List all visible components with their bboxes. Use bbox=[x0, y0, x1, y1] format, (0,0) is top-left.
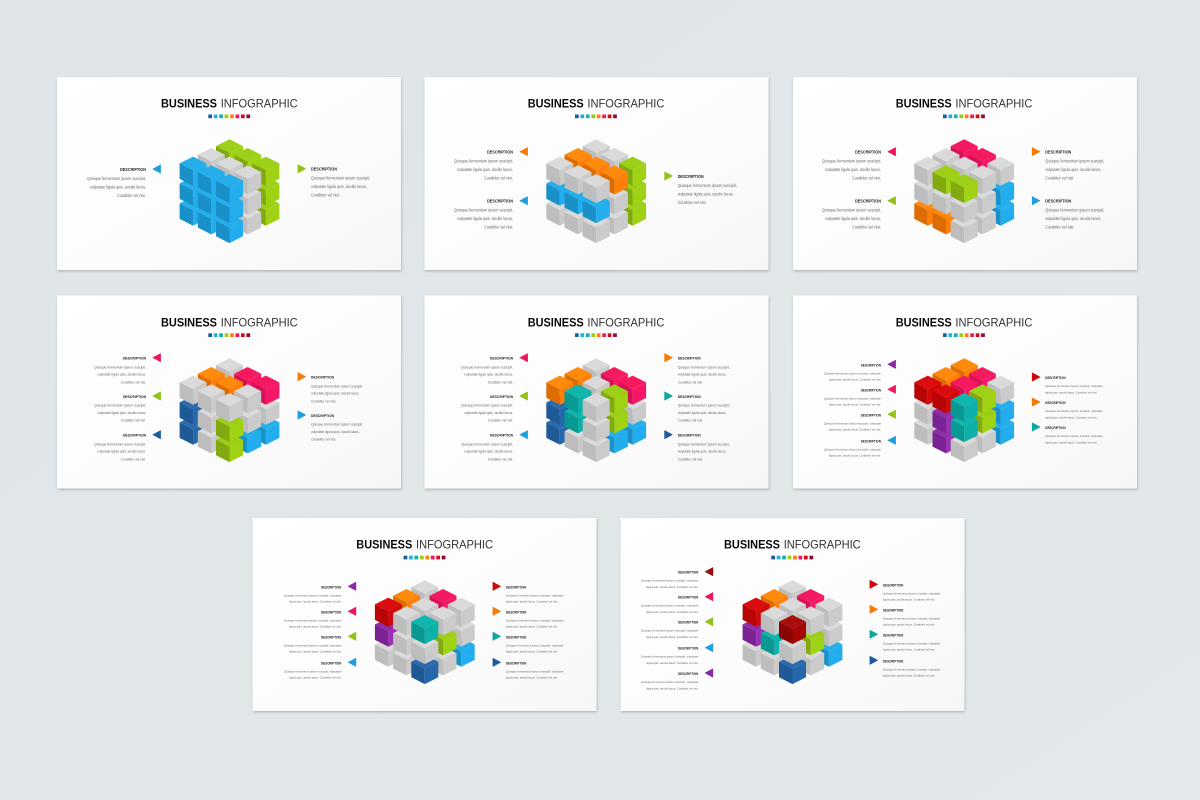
callout: left pink: DESCRIPTION bbox=[321, 610, 342, 614]
callout: right navy: Quisque fermentum ipsum suscipit, vulputate bbox=[506, 669, 564, 673]
callout: left green: DESCRIPTION bbox=[861, 413, 881, 417]
callout: right green bbox=[298, 165, 370, 197]
title: BUSINESS bbox=[724, 538, 780, 552]
callout: left green bbox=[822, 197, 896, 230]
cube: slide 7 bbox=[375, 580, 475, 684]
cube: slide 5 bbox=[546, 358, 646, 462]
callout: right red: DESCRIPTION bbox=[883, 583, 904, 587]
callout: right orange: DESCRIPTION bbox=[1045, 150, 1071, 155]
callout: left pink bbox=[822, 148, 896, 180]
callout: left navy: vulputate ligula quis, iaculis lacus. bbox=[97, 450, 146, 454]
callout: right orange: ligula quis, iaculis lacus. Curabitur vel nisi. bbox=[883, 623, 935, 627]
title: INFOGRAPHIC bbox=[221, 96, 298, 110]
callout: right blue: vulputate ligula quis, iaculis lacus. bbox=[311, 430, 360, 434]
callout: right red: DESCRIPTION bbox=[1045, 376, 1066, 380]
callout: right orange: ligula quis, iaculis lacus. Curabitur vel nisi. bbox=[1045, 415, 1097, 419]
callout: left pink: DESCRIPTION bbox=[855, 150, 881, 155]
callout: right orange: Quisque fermentum ipsum suscipit, vulputate bbox=[506, 618, 564, 622]
callout: left navy: Curabitur vel nisi. bbox=[121, 457, 146, 461]
callout: left orange: Quisque fermentum ipsum suscipit, bbox=[454, 158, 513, 164]
callout: left purple bbox=[284, 582, 356, 604]
cube: slide 3 bbox=[914, 139, 1014, 243]
callout: right orange: Curabitur vel nisi. bbox=[678, 380, 703, 384]
callout: right blue bbox=[298, 411, 363, 442]
panel: slide 4 bbox=[57, 296, 402, 490]
callout: right navy: Curabitur vel nisi. bbox=[678, 457, 703, 461]
callout: right orange: DESCRIPTION bbox=[678, 357, 701, 361]
callout: left pink: Quisque fermentum ipsum suscipit, bbox=[461, 365, 513, 369]
callout: left orange: vulputate ligula quis, iaculis lacus. bbox=[457, 167, 513, 172]
callout: right navy: ligula quis, iaculis lacus. Curabitur vel nisi. bbox=[506, 676, 558, 680]
callout: left green: vulputate ligula quis, iaculis lacus. bbox=[825, 216, 881, 221]
callout: left green: DESCRIPTION bbox=[678, 621, 699, 625]
callout: left blue: DESCRIPTION bbox=[487, 199, 513, 204]
callout: left green: Curabitur vel nisi. bbox=[488, 419, 513, 423]
callout: right navy bbox=[493, 658, 564, 680]
callout: right orange: Quisque fermentum ipsum suscipit, bbox=[1045, 158, 1104, 164]
color squares bbox=[575, 333, 617, 337]
panel: slide 8 bbox=[620, 518, 965, 712]
callout: left purple: Quisque fermentum ipsum suscipit, vulputate bbox=[824, 371, 881, 375]
callout: right teal: ligula quis, iaculis lacus. Curabitur vel nisi. bbox=[1045, 440, 1097, 444]
callout: left blue: ligula quis, iaculis lacus. Curabitur vel nisi. bbox=[646, 661, 698, 665]
callout: left green: DESCRIPTION bbox=[855, 199, 881, 204]
callout: right orange: DESCRIPTION bbox=[883, 608, 904, 612]
callout: left navy: DESCRIPTION bbox=[123, 434, 146, 438]
callout: right green: DESCRIPTION bbox=[311, 166, 337, 172]
callout: right green: DESCRIPTION bbox=[678, 174, 704, 179]
callout: left blue: DESCRIPTION bbox=[321, 661, 342, 665]
cube: slide 6 bbox=[914, 358, 1014, 462]
panel: slide 3 bbox=[793, 77, 1138, 271]
callout: left pink bbox=[824, 385, 896, 407]
color squares bbox=[404, 556, 445, 559]
callout: right orange: Quisque fermentum ipsum suscipit, vulputate bbox=[883, 616, 941, 620]
callout: left pink: Curabitur vel nisi. bbox=[852, 176, 881, 180]
callout: left blue: Quisque fermentum ipsum suscipit, vulputate bbox=[284, 669, 342, 673]
title bbox=[896, 96, 1033, 110]
callout: right red: Quisque fermentum ipsum suscipit, vulputate bbox=[883, 591, 941, 595]
callout: left pink: vulputate ligula quis, iaculis lacus. bbox=[97, 373, 146, 377]
callout: left green: DESCRIPTION bbox=[123, 395, 146, 399]
callout: left pink: Quisque fermentum ipsum suscipit, vulputate bbox=[641, 604, 699, 608]
callout: right orange: DESCRIPTION bbox=[506, 610, 527, 614]
callout: left pink: vulputate ligula quis, iaculis lacus. bbox=[825, 167, 881, 172]
callout: right navy: DESCRIPTION bbox=[883, 659, 904, 663]
callout: left blue: vulputate ligula quis, iaculis lacus. bbox=[90, 184, 146, 190]
color squares bbox=[771, 556, 813, 559]
callout: right green: Curabitur vel nisi. bbox=[678, 200, 707, 205]
title: BUSINESS bbox=[528, 96, 584, 110]
callout: left green: Quisque fermentum ipsum suscipit, vulputate bbox=[641, 629, 699, 633]
callout: right teal: Curabitur vel nisi. bbox=[678, 419, 703, 423]
callout: left blue bbox=[824, 436, 896, 458]
callout: left purple: ligula quis, iaculis lacus. Curabitur vel nisi. bbox=[289, 600, 341, 604]
callout: right green: Quisque fermentum ipsum suscipit, bbox=[311, 175, 370, 180]
callout: left blue: vulputate ligula quis, iaculis lacus. bbox=[464, 450, 513, 454]
callout: right teal: Quisque fermentum ipsum suscipit, vulputate bbox=[883, 641, 941, 645]
callout: right orange: vulputate ligula quis, iaculis lacus. bbox=[678, 373, 726, 377]
callout: left blue: Quisque fermentum ipsum suscipit, vulputate bbox=[824, 447, 881, 451]
color squares bbox=[943, 114, 985, 118]
callout: right orange bbox=[298, 373, 363, 403]
callout: left dark red: DESCRIPTION bbox=[678, 571, 699, 575]
callout: left green bbox=[641, 618, 713, 639]
callout: right orange bbox=[870, 605, 941, 627]
callout: left green: Quisque fermentum ipsum suscipit, bbox=[94, 404, 146, 408]
panel: slide 2 bbox=[424, 77, 769, 271]
title bbox=[528, 96, 665, 110]
card bbox=[57, 77, 402, 271]
callout: right teal: Quisque fermentum ipsum suscipit, bbox=[678, 404, 730, 408]
callout: left pink: ligula quis, iaculis lacus. Curabitur vel nisi. bbox=[289, 625, 341, 629]
callout: right orange: Curabitur vel nisi. bbox=[311, 399, 336, 403]
cube: slide 4 bbox=[180, 358, 279, 462]
callout: right red: ligula quis, iaculis lacus. Curabitur vel nisi. bbox=[1045, 390, 1097, 394]
title: INFOGRAPHIC bbox=[955, 96, 1033, 110]
callout: left pink: Quisque fermentum ipsum suscipit, vulputate bbox=[284, 618, 342, 622]
title: INFOGRAPHIC bbox=[955, 316, 1033, 330]
callout: left purple: ligula quis, iaculis lacus. Curabitur vel nisi. bbox=[829, 378, 881, 382]
title bbox=[161, 96, 298, 110]
callout: right blue: Curabitur vel nisi. bbox=[1045, 224, 1074, 230]
card bbox=[793, 77, 1138, 271]
callout: right teal: DESCRIPTION bbox=[678, 395, 701, 399]
callout: left blue: DESCRIPTION bbox=[678, 647, 699, 651]
panel: slide 5 bbox=[424, 296, 769, 490]
callout: right red: ligula quis, iaculis lacus. Curabitur vel nisi. bbox=[506, 600, 558, 604]
callout: left green: Quisque fermentum ipsum suscipit, vulputate bbox=[284, 643, 342, 647]
card bbox=[424, 296, 769, 490]
callout: left purple bbox=[824, 360, 896, 382]
callout: right green: Curabitur vel nisi. bbox=[311, 192, 340, 197]
callout: right orange: DESCRIPTION bbox=[311, 376, 334, 380]
title: BUSINESS bbox=[528, 316, 584, 330]
card bbox=[620, 518, 965, 712]
callout: left orange bbox=[454, 148, 528, 180]
callout: right green: vulputate ligula quis, iaculis lacus. bbox=[678, 192, 734, 196]
callout: left green bbox=[284, 632, 356, 654]
title bbox=[161, 316, 298, 330]
callout: right orange: Quisque fermentum ipsum suscipit, vulputate bbox=[1045, 409, 1103, 413]
callout: left purple: DESCRIPTION bbox=[861, 363, 881, 367]
title: INFOGRAPHIC bbox=[221, 316, 298, 330]
callout: left blue: ligula quis, iaculis lacus. Curabitur vel nisi. bbox=[829, 454, 881, 458]
callout: left dark red: ligula quis, iaculis lacus. Curabitur vel nisi. bbox=[646, 585, 698, 589]
callout: right green: vulputate ligula quis, iaculis lacus. bbox=[311, 184, 367, 189]
callout: right orange: ligula quis, iaculis lacus. Curabitur vel nisi. bbox=[506, 625, 558, 629]
callout: left navy bbox=[94, 431, 160, 461]
callout: left green: Curabitur vel nisi. bbox=[121, 419, 146, 423]
title: INFOGRAPHIC bbox=[587, 96, 665, 110]
callout: right blue: DESCRIPTION bbox=[1045, 199, 1071, 204]
color squares bbox=[208, 114, 250, 118]
callout: right orange: Quisque fermentum ipsum suscipit, bbox=[311, 384, 363, 388]
callout: right blue: vulputate ligula quis, iaculis lacus. bbox=[1045, 216, 1101, 221]
panel: slide 7 bbox=[252, 518, 597, 712]
callout: left blue: Curabitur vel nisi. bbox=[488, 457, 513, 461]
callout: left orange: DESCRIPTION bbox=[487, 150, 513, 155]
callout: right teal: ligula quis, iaculis lacus. Curabitur vel nisi. bbox=[506, 650, 558, 654]
callout: right orange: DESCRIPTION bbox=[1045, 401, 1066, 405]
callout: left blue: Quisque fermentum ipsum suscipit, bbox=[87, 176, 146, 181]
title: INFOGRAPHIC bbox=[416, 538, 493, 552]
title: INFOGRAPHIC bbox=[784, 538, 861, 552]
callout: left blue bbox=[87, 165, 160, 198]
callout: left navy: Quisque fermentum ipsum suscipit, bbox=[94, 442, 146, 446]
callout: left pink: DESCRIPTION bbox=[490, 357, 513, 361]
callout: left blue: Quisque fermentum ipsum suscipit, bbox=[461, 442, 513, 446]
title: BUSINESS bbox=[356, 538, 412, 552]
callout: right navy bbox=[665, 431, 730, 461]
callout: right red bbox=[870, 580, 941, 602]
callout: left blue: Quisque fermentum ipsum suscipit, bbox=[454, 208, 513, 212]
callout: right navy: Quisque fermentum ipsum suscipit, vulputate bbox=[883, 667, 941, 671]
callout: right red: ligula quis, iaculis lacus. Curabitur vel nisi. bbox=[883, 598, 935, 602]
callout: right navy: Quisque fermentum ipsum suscipit, bbox=[678, 442, 730, 446]
callout: right navy: DESCRIPTION bbox=[506, 661, 527, 665]
callout: right orange: vulputate ligula quis, iaculis lacus. bbox=[1045, 167, 1101, 172]
callout: left green: vulputate ligula quis, iaculis lacus. bbox=[97, 411, 146, 415]
callout: left green: Quisque fermentum ipsum suscipit, bbox=[822, 208, 881, 212]
color squares bbox=[208, 333, 250, 337]
callout: left green: ligula quis, iaculis lacus. Curabitur vel nisi. bbox=[289, 650, 341, 654]
callout: right blue: Curabitur vel nisi. bbox=[311, 438, 336, 442]
callout: left orange: Curabitur vel nisi. bbox=[484, 176, 513, 180]
callout: left pink: ligula quis, iaculis lacus. Curabitur vel nisi. bbox=[829, 403, 881, 407]
callout: left blue: vulputate ligula quis, iaculis lacus. bbox=[457, 216, 513, 221]
callout: left green: Quisque fermentum ipsum suscipit, bbox=[461, 404, 513, 408]
callout: left green: Curabitur vel nisi. bbox=[852, 224, 881, 230]
callout: right red bbox=[1032, 373, 1103, 394]
callout: left pink: DESCRIPTION bbox=[861, 388, 881, 392]
callout: right orange bbox=[1032, 398, 1103, 419]
title bbox=[528, 316, 665, 330]
callout: right teal: vulputate ligula quis, iaculis lacus. bbox=[678, 411, 726, 415]
callout: left green bbox=[94, 392, 160, 423]
callout: right orange: Quisque fermentum ipsum suscipit, bbox=[678, 365, 730, 369]
callout: right teal bbox=[870, 630, 941, 652]
callout: left green: vulputate ligula quis, iaculis lacus. bbox=[464, 411, 513, 415]
callout: right orange: Curabitur vel nisi. bbox=[1045, 176, 1074, 180]
callout: left dark red bbox=[641, 568, 713, 589]
panel: slide 1 bbox=[57, 77, 402, 271]
title: BUSINESS bbox=[161, 316, 217, 330]
callout: right orange: vulputate ligula quis, iaculis lacus. bbox=[311, 392, 360, 396]
title: BUSINESS bbox=[896, 316, 952, 330]
card bbox=[252, 518, 597, 712]
callout: left dark red: Quisque fermentum ipsum suscipit, vulputate bbox=[641, 579, 699, 583]
callout: left green: ligula quis, iaculis lacus. Curabitur vel nisi. bbox=[829, 428, 881, 432]
cube: slide 2 bbox=[546, 139, 646, 243]
callout: left green bbox=[824, 410, 896, 432]
callout: left blue: DESCRIPTION bbox=[490, 434, 513, 438]
card bbox=[424, 77, 769, 271]
callout: left purple bbox=[641, 669, 713, 690]
callout: left pink: DESCRIPTION bbox=[678, 596, 699, 600]
callout: left pink: ligula quis, iaculis lacus. Curabitur vel nisi. bbox=[646, 610, 698, 614]
callout: left blue: ligula quis, iaculis lacus. Curabitur vel nisi. bbox=[289, 676, 341, 680]
callout: right navy: vulputate ligula quis, iaculis lacus. bbox=[678, 450, 726, 454]
callout: right red: DESCRIPTION bbox=[506, 585, 527, 589]
title bbox=[356, 538, 493, 552]
callout: right navy: DESCRIPTION bbox=[678, 434, 701, 438]
color squares bbox=[575, 114, 617, 118]
callout: left blue bbox=[454, 197, 528, 230]
callout: right teal: DESCRIPTION bbox=[883, 633, 904, 637]
title bbox=[724, 538, 861, 552]
callout: left pink: Curabitur vel nisi. bbox=[121, 380, 146, 384]
callout: left pink: Quisque fermentum ipsum suscipit, bbox=[94, 365, 146, 369]
title bbox=[896, 316, 1033, 330]
callout: left pink bbox=[94, 354, 160, 384]
callout: right red bbox=[493, 582, 564, 604]
callout: left purple: Quisque fermentum ipsum suscipit, vulputate bbox=[641, 680, 699, 684]
cube: slide 1 bbox=[180, 139, 279, 243]
callout: right blue: Quisque fermentum ipsum suscipit, bbox=[1045, 208, 1104, 212]
callout: left blue: DESCRIPTION bbox=[861, 439, 881, 443]
callout: left green: ligula quis, iaculis lacus. Curabitur vel nisi. bbox=[646, 635, 698, 639]
callout: left pink bbox=[284, 607, 356, 629]
callout: right teal: Quisque fermentum ipsum suscipit, vulputate bbox=[506, 643, 564, 647]
callout: left green: Quisque fermentum ipsum suscipit, vulputate bbox=[824, 421, 881, 425]
color squares bbox=[943, 333, 985, 337]
title: INFOGRAPHIC bbox=[587, 316, 665, 330]
card bbox=[793, 296, 1138, 490]
callout: left blue: Curabitur vel nisi. bbox=[117, 193, 146, 198]
callout: left pink bbox=[641, 593, 713, 614]
callout: right teal: ligula quis, iaculis lacus. Curabitur vel nisi. bbox=[883, 648, 935, 652]
callout: right red: Quisque fermentum ipsum suscipit, vulputate bbox=[506, 593, 564, 597]
callout: left pink bbox=[461, 354, 528, 384]
callout: right navy bbox=[870, 656, 941, 678]
callout: left blue: DESCRIPTION bbox=[120, 167, 146, 172]
callout: right navy: ligula quis, iaculis lacus. Curabitur vel nisi. bbox=[883, 674, 935, 678]
callout: right green bbox=[665, 172, 737, 205]
callout: left blue: Curabitur vel nisi. bbox=[484, 224, 513, 230]
card bbox=[57, 296, 402, 490]
callout: right red: Quisque fermentum ipsum suscipit, vulputate bbox=[1045, 384, 1103, 388]
callout: right green: Quisque fermentum ipsum suscipit, bbox=[678, 183, 737, 188]
callout: left pink: Quisque fermentum ipsum suscipit, bbox=[822, 158, 881, 164]
callout: right orange bbox=[1032, 148, 1104, 180]
callout: left blue bbox=[284, 658, 356, 680]
callout: left blue: Quisque fermentum ipsum suscipit, vulputate bbox=[641, 655, 699, 659]
callout: right teal bbox=[1032, 423, 1103, 444]
callout: right teal: DESCRIPTION bbox=[1045, 426, 1066, 430]
callout: right teal: DESCRIPTION bbox=[506, 635, 527, 639]
callout: left pink: vulputate ligula quis, iaculis lacus. bbox=[464, 373, 513, 377]
callout: left purple: Quisque fermentum ipsum suscipit, vulputate bbox=[284, 593, 342, 597]
callout: right blue: Quisque fermentum ipsum suscipit, bbox=[311, 423, 363, 427]
callout: right blue bbox=[1032, 197, 1104, 230]
callout: right teal: Quisque fermentum ipsum suscipit, vulputate bbox=[1045, 434, 1103, 438]
callout: right teal bbox=[493, 632, 564, 654]
callout: right blue: DESCRIPTION bbox=[311, 414, 334, 418]
callout: left purple: ligula quis, iaculis lacus. Curabitur vel nisi. bbox=[646, 686, 698, 690]
callout: left green: DESCRIPTION bbox=[490, 395, 513, 399]
callout: left pink: DESCRIPTION bbox=[123, 357, 146, 361]
callout: left purple: DESCRIPTION bbox=[321, 585, 342, 589]
callout: right orange bbox=[493, 607, 564, 629]
cube: slide 8 bbox=[743, 580, 842, 684]
callout: left green bbox=[461, 392, 528, 423]
callout: left blue bbox=[461, 431, 528, 461]
callout: left blue bbox=[641, 644, 713, 665]
title: BUSINESS bbox=[161, 96, 217, 110]
callout: right orange bbox=[665, 354, 730, 384]
callout: left pink: Curabitur vel nisi. bbox=[488, 380, 513, 384]
callout: left pink: Quisque fermentum ipsum suscipit, vulputate bbox=[824, 396, 881, 400]
callout: left purple: DESCRIPTION bbox=[678, 672, 699, 676]
panel: slide 6 bbox=[793, 296, 1138, 490]
callout: left green: DESCRIPTION bbox=[321, 635, 342, 639]
callout: right teal bbox=[665, 392, 730, 423]
title: BUSINESS bbox=[896, 96, 952, 110]
